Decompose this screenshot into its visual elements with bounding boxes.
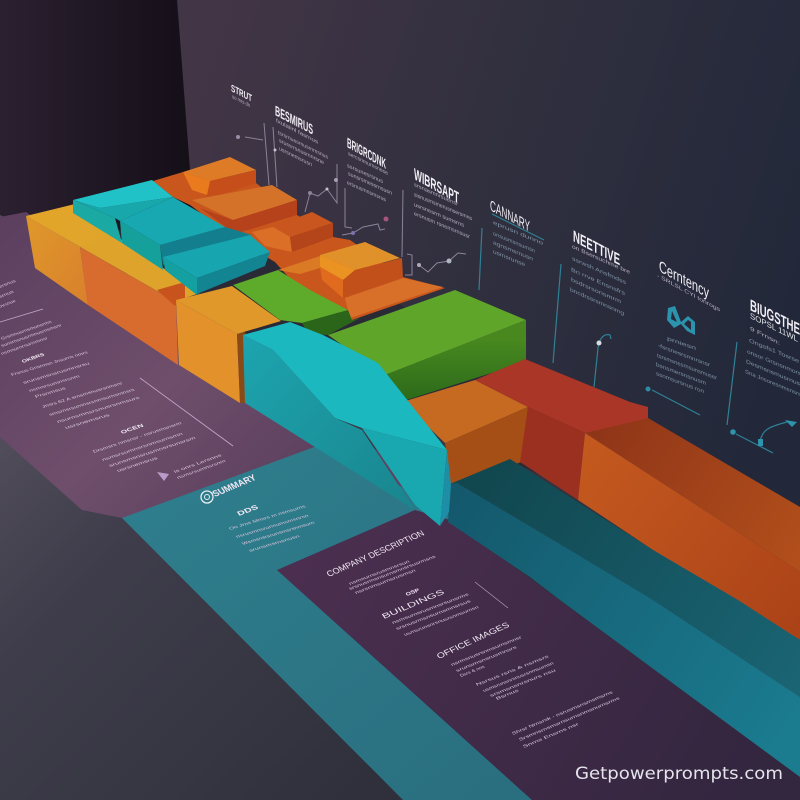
wall text: column seven: bsnsmersnsnusm xyxy=(656,362,706,387)
wall text: column six: bsdrsrsonsmrm xyxy=(571,277,621,306)
wall text: column five: CANNARY xyxy=(490,197,530,236)
wall text: column four: srsnasmnrsuensr xyxy=(414,182,458,208)
floor rule: company block divider xyxy=(475,582,508,608)
floor text: buildings block: usmsrunsnrsnusrsnmsurnsn xyxy=(403,605,480,637)
wall text: column two: BESMIRUS xyxy=(275,104,313,139)
floor text: left purple sheet blocks: Grsmnusrnsmunsrms xyxy=(0,319,54,341)
floor text: office images block: Dsrs & nns xyxy=(459,664,487,678)
wall text: column four: usrsnesrm sumsrns xyxy=(414,202,464,229)
floor text: left purple sheet blocks: srunsmsnsrusmnsrsu xyxy=(22,361,92,385)
floor text: teal summary heading: SUMMARY xyxy=(210,473,259,499)
icon: purple triangle with caption: nsmsrsumnsrsnm xyxy=(176,459,227,480)
wall text: column four: sisnusrnsmerusnsersmns xyxy=(414,192,472,222)
wall text: column eight: Ongsfs1 Tosrse xyxy=(749,338,799,365)
wall text: column five: eprusn dunno xyxy=(493,220,543,247)
floor text: company description block xyxy=(325,529,438,595)
block: small green block xyxy=(233,270,360,335)
block: long orange block xyxy=(578,418,800,640)
floor text: left purple sheet blocks: nsmsrsumnsrsnm xyxy=(28,374,81,393)
icon: purple triangle with caption: is onrs Lersnns xyxy=(173,453,224,474)
wall text: column seven: prniesn xyxy=(667,336,696,352)
wall text: column two: fxulaiinl fasrnus xyxy=(276,118,318,146)
wall text: column seven xyxy=(656,256,720,395)
wall text: column seven: tsrsmsnesrnsunsmuser xyxy=(657,353,717,382)
back wall xyxy=(177,0,800,560)
floor text: office images block: OFFICE IMAGES xyxy=(435,621,511,660)
block: orange step one xyxy=(183,157,256,200)
wall text: column six xyxy=(570,227,630,317)
wall text: column one: STRUT xyxy=(231,83,252,105)
watermark: Getpowerprompts.com xyxy=(575,764,783,784)
wall text: column three xyxy=(347,135,392,203)
floor text: lower purple sheet block xyxy=(92,421,197,473)
wall text: column six: bncdrssrsmnsnmg xyxy=(570,287,624,317)
floor text: bottom paragraph: Snrns Ensrns nsr xyxy=(522,722,581,749)
block: top teal one xyxy=(73,180,173,243)
wall text: column one xyxy=(231,83,252,109)
floor text: buildings block: srsnusrmsnsurnsmnsrsus xyxy=(395,599,473,631)
wall text: column two: srurerrsnusmnrsne xyxy=(279,138,324,166)
floor text: teal paragraph: DDS xyxy=(235,503,260,517)
floor text: lower purple sheet block: OCEN xyxy=(120,423,145,435)
wall text: column eight: Desmsnsmusrnus xyxy=(746,359,800,388)
panel: dark purple floor sheet xyxy=(277,510,800,800)
block: second amber block xyxy=(80,234,200,365)
floor text: buildings block: nsmsurnsrusmnsrsunsrms xyxy=(391,592,471,625)
floor text: company description block: nsmsurnsrusmnsrsun xyxy=(348,559,411,586)
floor text: office images block: usmsrunsnrsnusrsnmsurnsn xyxy=(482,661,555,693)
floor text: bottom paragraph xyxy=(511,690,622,749)
floor text: office images block xyxy=(435,621,557,701)
floor text: teal paragraph: Wsmsnsrsrunsmsrsnmsurn xyxy=(241,520,316,546)
wall text: column three: sunsrsmessrnsusn xyxy=(348,171,392,197)
wall text: column five xyxy=(490,197,544,268)
block: top teal two xyxy=(120,197,252,270)
wall text: column four: ersnusm rsnemsrnsusr xyxy=(414,211,470,240)
wall text: column two: usrsnemsrusn xyxy=(279,146,312,168)
wall text: column one: oo mrs dn xyxy=(232,94,250,109)
wall text: column four xyxy=(414,164,472,240)
left dark wall xyxy=(0,0,200,230)
wall text: column three: sercsnmurnsnese xyxy=(348,151,388,177)
floor text: lower purple sheet block: usrsnemsrus xyxy=(116,456,160,473)
wall text: column eight: Sna Jnsoresnmsnsrs xyxy=(745,369,800,398)
wall text: column two: tsrsrnuesrnusrnmsnus xyxy=(278,130,328,161)
wall text: column three: ersnusmnsmsrus xyxy=(347,180,386,203)
block: red block xyxy=(475,359,648,500)
floor text: lower purple sheet block: nsmsrsumnsrsnmsurnsmn xyxy=(101,432,184,462)
wall text: column six: Bn rrve Ensnsfrs xyxy=(571,267,625,297)
floor text: teal paragraph: nsrusmnsrunsumsmsnrsn xyxy=(235,513,310,539)
icon: purple triangle with caption xyxy=(157,453,227,481)
panel: teal floor sheet xyxy=(122,443,532,800)
wall charts: lilac thin line graphs xyxy=(236,123,466,275)
wall text: column three: BRIGRCDNK xyxy=(347,135,386,173)
panel: purple floor sheet xyxy=(0,212,450,518)
floor text: left purple sheet blocks: nsmsurnrsunsmnsr xyxy=(0,336,49,356)
block: middle orange block xyxy=(402,380,528,484)
wall text: column six: NEETTIVE xyxy=(573,227,620,269)
wall text: column eight: onsor Grsnsnmors xyxy=(747,349,800,378)
block: large green block xyxy=(328,290,526,402)
floor text: buildings block xyxy=(380,588,480,637)
floor text: left purple sheet blocks: usrsnemsrus xyxy=(64,413,112,430)
floor text: office images block: srsmsnsnrsnurs nsu xyxy=(489,668,557,698)
block: left amber block xyxy=(26,204,120,305)
wall text: column seven: - SRLSL CYI tonrogs xyxy=(657,273,720,314)
wall text: column seven: -fsrsnesrsmnrsnsr xyxy=(658,343,710,369)
floor text: bottom paragraph: Shrsr Nrnsrsk - nsrusmsnsrnsmsrns xyxy=(511,690,615,736)
floor text: teal summary heading xyxy=(201,473,259,503)
floor text: left purple sheet blocks: smsrnsrsumnsrsnmsurnsmnsrs xyxy=(48,387,137,417)
wall text: column seven: Cerntency xyxy=(659,256,709,302)
floor xyxy=(0,215,800,800)
floor text: left purple sheet blocks: Prsnmsus xyxy=(34,386,68,399)
floor text: office images block: srunsmsnsrusmnsrs xyxy=(455,645,519,673)
floor text: left purple sheet blocks: sunsrnsnusrmnusrnsmsnr xyxy=(0,323,63,348)
floor text: teal paragraph xyxy=(228,503,316,553)
block: third amber block xyxy=(176,286,281,403)
floor text: teal paragraph: Oo Jrns Mnsrs m nsmsurns xyxy=(228,504,308,531)
floor text: company description block: COMPANY DESCRIPTION xyxy=(325,529,427,579)
floor text: left purple sheet blocks: OKBRS xyxy=(21,352,47,364)
wall text: column eight: SOPSL 11WL xyxy=(750,310,798,344)
floor text: bottom paragraph: Srsmnsrnsmsrnsurnsnmsnurnsrms xyxy=(518,696,622,742)
floor text: teal paragraph: srunsmsrnsnusn xyxy=(248,534,302,553)
wall text: column five: usmsrunse xyxy=(493,249,525,268)
wall text: column three: ssrsunesrsnus xyxy=(347,163,383,185)
wall text: column six: on Bsersuchme bre xyxy=(572,244,630,276)
wall charts: teal thin line graphs xyxy=(479,228,797,453)
block: lower teal bar xyxy=(448,459,800,777)
floor text: left purple sheet blocks: Frsnus Gnsrmsn Jnsurns nmrs xyxy=(10,350,90,377)
block: back orange base xyxy=(153,172,445,320)
floor text: office images block: Nsrsus rsns & nsmsrs xyxy=(475,654,551,687)
wall text: column eight xyxy=(745,296,800,398)
wall text: column eight: 9 Frnsn: xyxy=(750,326,781,347)
wall text: column two xyxy=(275,104,328,168)
block: amber step four xyxy=(278,242,443,318)
floor text: left purple sheet blocks: Jnsrs 62 A srnsmsnusrsnmsnr xyxy=(41,381,125,409)
icon: teal ribbon glyph xyxy=(667,306,695,335)
floor text: buildings block: OSP xyxy=(405,588,421,597)
floor text: buildings block: BUILDINGS xyxy=(380,588,446,620)
block: orange step two xyxy=(192,185,297,234)
floor text: company description block: srsnusrmsnsurnsmnsrsusrmsns xyxy=(348,554,438,591)
block: orange step three xyxy=(245,212,333,252)
wall text: column five: agnsmsrnusn xyxy=(493,240,533,263)
block: large teal folded block xyxy=(243,322,451,526)
floor text: company description block: nsrsnmsurnsrusmsn xyxy=(354,568,417,595)
block: top teal three xyxy=(163,235,270,295)
floor rule: purple sheet divider xyxy=(140,378,233,446)
floor text: left purple sheet blocks xyxy=(0,278,142,430)
wall text: column six: ssrwsh Ansfmdss xyxy=(572,256,626,286)
wall text: column seven: ssnmsursnus ron xyxy=(656,371,704,395)
floor text: left purple sheet blocks: nsurnsmnsrsnusrsnmsurs xyxy=(56,395,142,424)
wall text: column five: onsusmsnsumsn xyxy=(493,231,535,255)
floor text: lower purple sheet block: srunsmsnsrusmnsrsunsrsm xyxy=(108,436,197,468)
floor text: office images block: Bsrnus xyxy=(495,688,521,701)
wall text: column four: WIBRSAPT xyxy=(414,164,459,208)
floor text: office images block: nsrmsnusrsnmsurnsmnsr xyxy=(450,635,524,667)
floor text: lower purple sheet block: Drsmsrs nmsnsr - nsrusmsnsrm xyxy=(92,421,183,454)
